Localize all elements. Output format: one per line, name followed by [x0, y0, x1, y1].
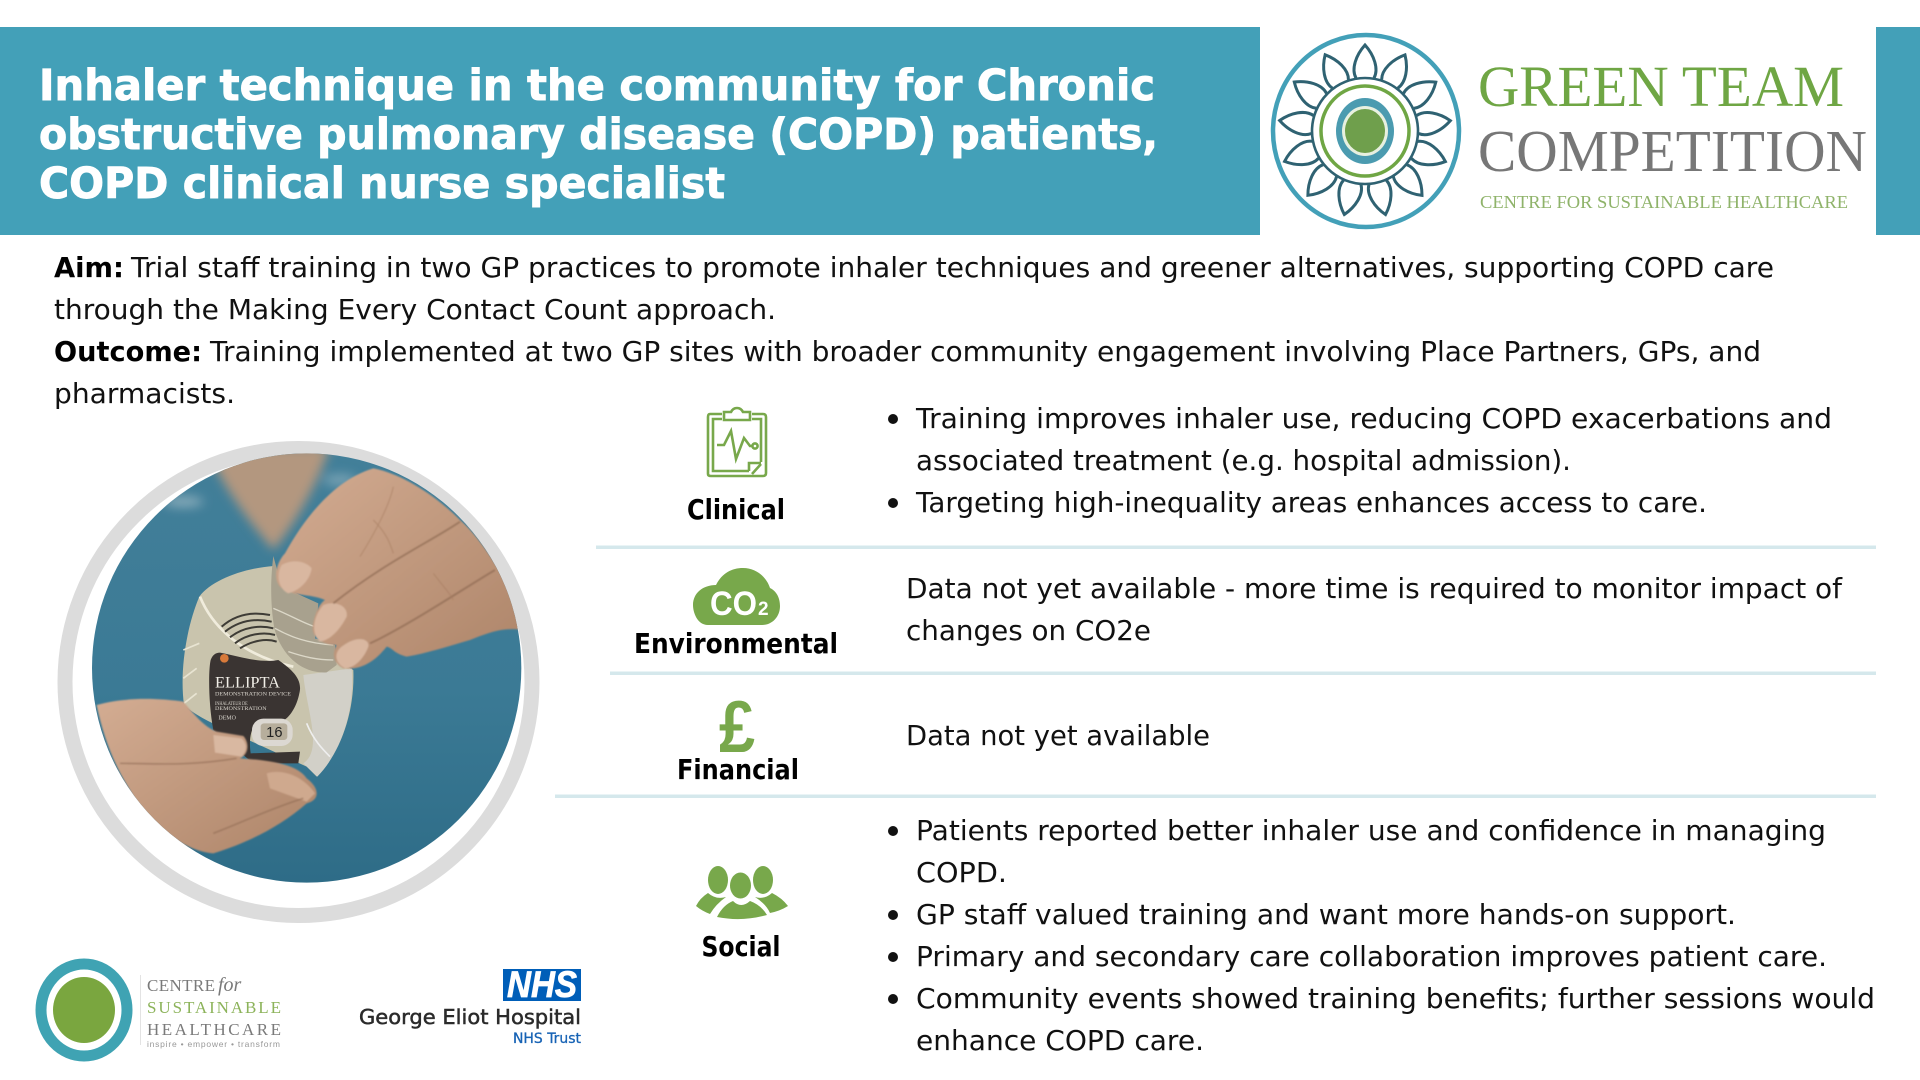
logo: Green Team Competition — [1273, 35, 1867, 227]
bullet list: clinical: Training improves inhaler use, reducing COPD exacerbations and — [915, 403, 1832, 435]
text block: aim and outcome — [54, 252, 1774, 410]
label: Clinical: Clinical — [687, 494, 785, 526]
bullet list: social: COPD. — [916, 857, 1007, 889]
photo: hands holding Ellipta inhaler: ELLIPTA — [215, 674, 280, 691]
text: environmental data — [906, 573, 1843, 647]
logo: Centre for Sustainable Healthcare — [41, 964, 281, 1056]
icon: CO2 cloud: CO — [710, 585, 757, 623]
logo: Centre for Sustainable Healthcare: CENTRE — [147, 976, 215, 995]
logo: Centre for Sustainable Healthcare: for — [218, 974, 242, 996]
title: Inhaler technique in the community for Chronic — [39, 61, 1155, 111]
row: clinical — [687, 403, 1832, 526]
bullet list: social: Primary and secondary care collaboration improves patient care. — [916, 941, 1827, 973]
fingernails — [279, 561, 368, 668]
icon: sun petals — [1278, 45, 1452, 217]
row: financial — [677, 687, 1210, 786]
logo: George Eliot Hospital NHS Trust: NHS Trust — [513, 1031, 582, 1047]
bullet list: social: Community events showed training benefits; further sessions would — [916, 983, 1875, 1015]
logo: George Eliot Hospital NHS Trust: George Eliot Hospital — [359, 1005, 581, 1029]
header band — [0, 27, 1920, 235]
photo: hands holding Ellipta inhaler: 16 — [266, 725, 282, 741]
text: financial data: Data not yet available — [906, 720, 1210, 752]
photo: hands holding Ellipta inhaler: DEMONSTRATION — [215, 706, 267, 712]
row: social — [696, 815, 1875, 1057]
logo: Centre for Sustainable Healthcare: inspire • empower • transform — [147, 1039, 280, 1049]
logo: George Eliot Hospital NHS Trust — [359, 964, 582, 1047]
bullet list: clinical: associated treatment (e.g. hospital admission). — [916, 445, 1571, 477]
logo: Green Team Competition: COMPETITION — [1478, 118, 1867, 184]
bullet list: clinical — [888, 403, 1832, 519]
photo: hands holding Ellipta inhaler: DEMO — [218, 715, 237, 721]
icon: group of people — [696, 866, 788, 919]
bullet list: social: enhance COPD care. — [916, 1025, 1204, 1057]
text: environmental data: changes on CO2e — [906, 615, 1151, 647]
inhaler body — [183, 566, 353, 777]
icon: pound sign: £ — [719, 687, 755, 768]
photo: hands holding Ellipta inhaler: INHALATEUR DE — [215, 701, 248, 707]
left hand — [97, 699, 317, 853]
logo: Centre for Sustainable Healthcare: HEALTHCARE — [147, 1020, 281, 1039]
icon: clipboard — [708, 408, 766, 476]
cap — [271, 556, 337, 672]
row: environmental — [634, 568, 1843, 660]
text block: aim and outcome: pharmacists. — [54, 378, 235, 410]
text block: aim and outcome: through the Making Every Contact Count approach. — [54, 294, 776, 326]
logo: Green Team Competition: CENTRE FOR SUSTAINABLE HEALTHCARE — [1480, 192, 1848, 212]
bullet list: social — [888, 815, 1875, 1057]
dose counter — [252, 719, 293, 746]
label: Environmental: Environmental — [634, 628, 838, 660]
bullet list: social: Patients reported better inhaler use and confidence in managing — [916, 815, 1826, 847]
text block: aim and outcome: Outcome: — [54, 336, 202, 368]
bullet list: social: GP staff valued training and want more hands-on support. — [916, 899, 1736, 931]
label: Financial: Financial — [677, 754, 799, 786]
logo: George Eliot Hospital NHS Trust: NHS — [507, 964, 577, 1005]
neck and collar — [163, 447, 357, 550]
photo: hands holding Ellipta inhaler — [65, 447, 532, 916]
photo: hands holding Ellipta inhaler: DEMONSTRATION DEVICE — [215, 692, 292, 698]
title: obstructive pulmonary disease (COPD) patients, — [39, 110, 1158, 160]
icon: CO2 cloud: 2 — [758, 599, 769, 620]
text block: aim and outcome: Trial staff training in two GP practices to promote inhaler techniques and greener alternatives, supporting COPD care — [130, 252, 1774, 284]
bullet list: clinical: Targeting high-inequality areas enhances access to care. — [915, 487, 1707, 519]
title — [39, 61, 1158, 209]
text block: aim and outcome: Aim: — [54, 252, 124, 284]
logo: Green Team Competition: GREEN TEAM — [1478, 54, 1844, 119]
inhaler vents — [222, 614, 277, 648]
title: COPD clinical nurse specialist — [39, 159, 725, 209]
text: environmental data: Data not yet available - more time is required to monitor impact of — [906, 573, 1843, 605]
text block: aim and outcome: Training implemented at two GP sites with broader community engagement involving Place Partners, GPs, and — [209, 336, 1761, 368]
logo: Centre for Sustainable Healthcare: SUSTAINABLE — [147, 998, 281, 1017]
inhaler label — [209, 653, 300, 763]
label: Social: Social — [702, 931, 780, 963]
icon: CO2 cloud — [693, 568, 780, 625]
right hand — [276, 468, 522, 669]
